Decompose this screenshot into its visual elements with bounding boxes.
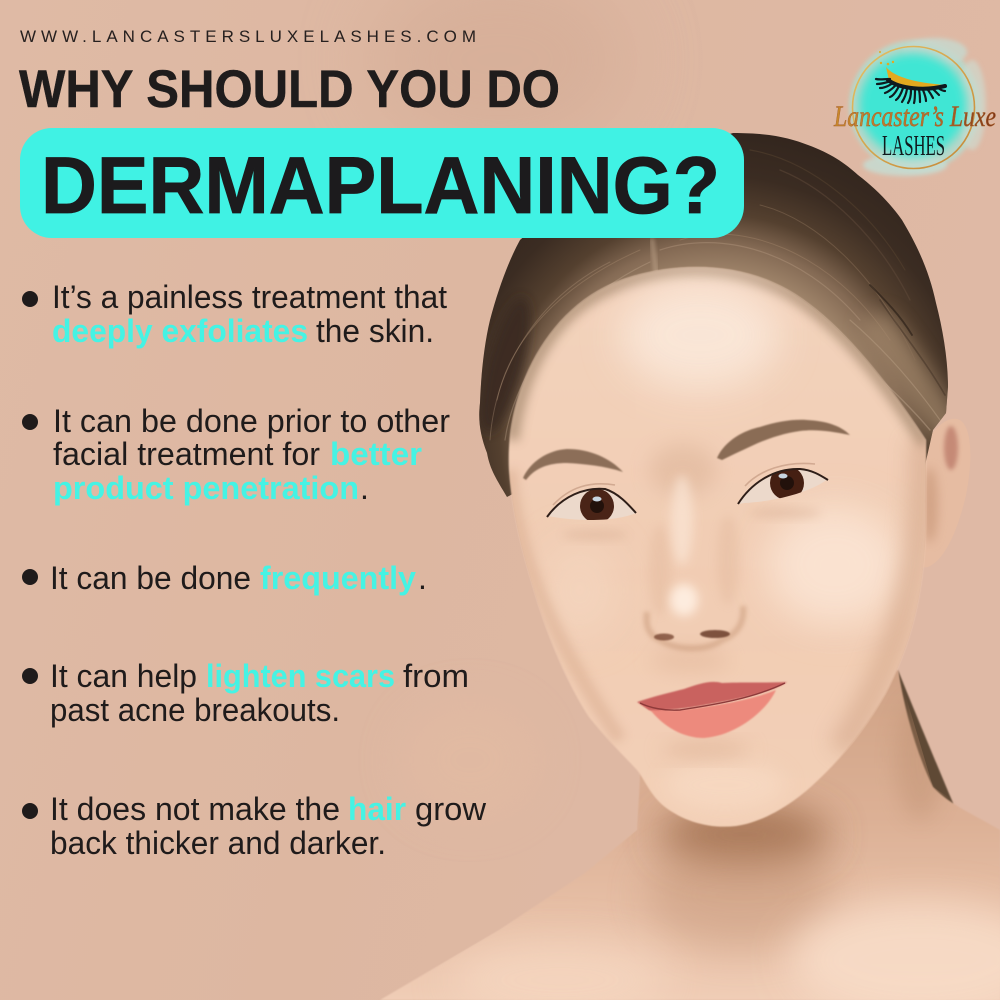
right eyebrow	[717, 420, 850, 460]
benefit 2: product penetration	[53, 470, 359, 506]
gold glitter eyelid	[879, 51, 945, 89]
lashes wordmark: LASHES	[882, 131, 945, 162]
benefit 1: the skin.	[316, 313, 434, 349]
left eye	[547, 484, 636, 540]
neck and shoulders	[380, 670, 1000, 1000]
benefit 3: It can be done	[50, 560, 251, 596]
benefit 5: hair	[348, 791, 406, 827]
benefit 5	[22, 791, 487, 861]
benefit 4	[22, 658, 469, 728]
hair	[469, 133, 948, 510]
logo: Lancaster's Luxe Lashes	[833, 38, 996, 176]
website url: WWW.LANCASTERSLUXELASHES.COM	[20, 27, 476, 46]
watercolor blot	[849, 38, 986, 176]
soft hairline blend	[512, 270, 926, 445]
heading: why should you do: WHY SHOULD YOU DO	[19, 60, 560, 119]
benefit 1: deeply exfoliates	[52, 313, 308, 349]
ear	[914, 419, 970, 568]
benefit 1: It’s a painless treatment that	[52, 279, 447, 315]
benefit 2: better	[330, 436, 422, 472]
benefit 4: from	[403, 658, 469, 694]
benefit 4: past acne breakouts.	[50, 692, 340, 728]
benefit 5: It does not make the	[50, 791, 340, 827]
face	[509, 267, 926, 827]
benefit 3	[22, 560, 427, 596]
right eye	[738, 463, 828, 518]
nose	[647, 475, 743, 648]
lips	[637, 682, 787, 738]
benefit 2: It can be done prior to other	[53, 403, 450, 439]
portrait of woman	[380, 133, 1000, 1000]
left eyebrow	[523, 449, 623, 480]
benefit 2: .	[360, 470, 369, 506]
ponytail	[898, 670, 953, 810]
benefit 3: frequently	[260, 560, 416, 596]
benefit 2: facial treatment for	[53, 436, 320, 472]
benefit 5: back thicker and darker.	[50, 825, 386, 861]
eyelashes	[876, 79, 945, 103]
benefit 4: lighten scars	[206, 658, 395, 694]
gold ring	[852, 46, 974, 168]
benefit 5: grow	[415, 791, 487, 827]
benefit 1	[22, 279, 447, 349]
benefit 2	[22, 403, 450, 506]
heading pill: dermaplaning: DERMAPLANING?	[41, 141, 720, 231]
benefit 4: It can help	[50, 658, 197, 694]
benefit 3: .	[418, 560, 427, 596]
